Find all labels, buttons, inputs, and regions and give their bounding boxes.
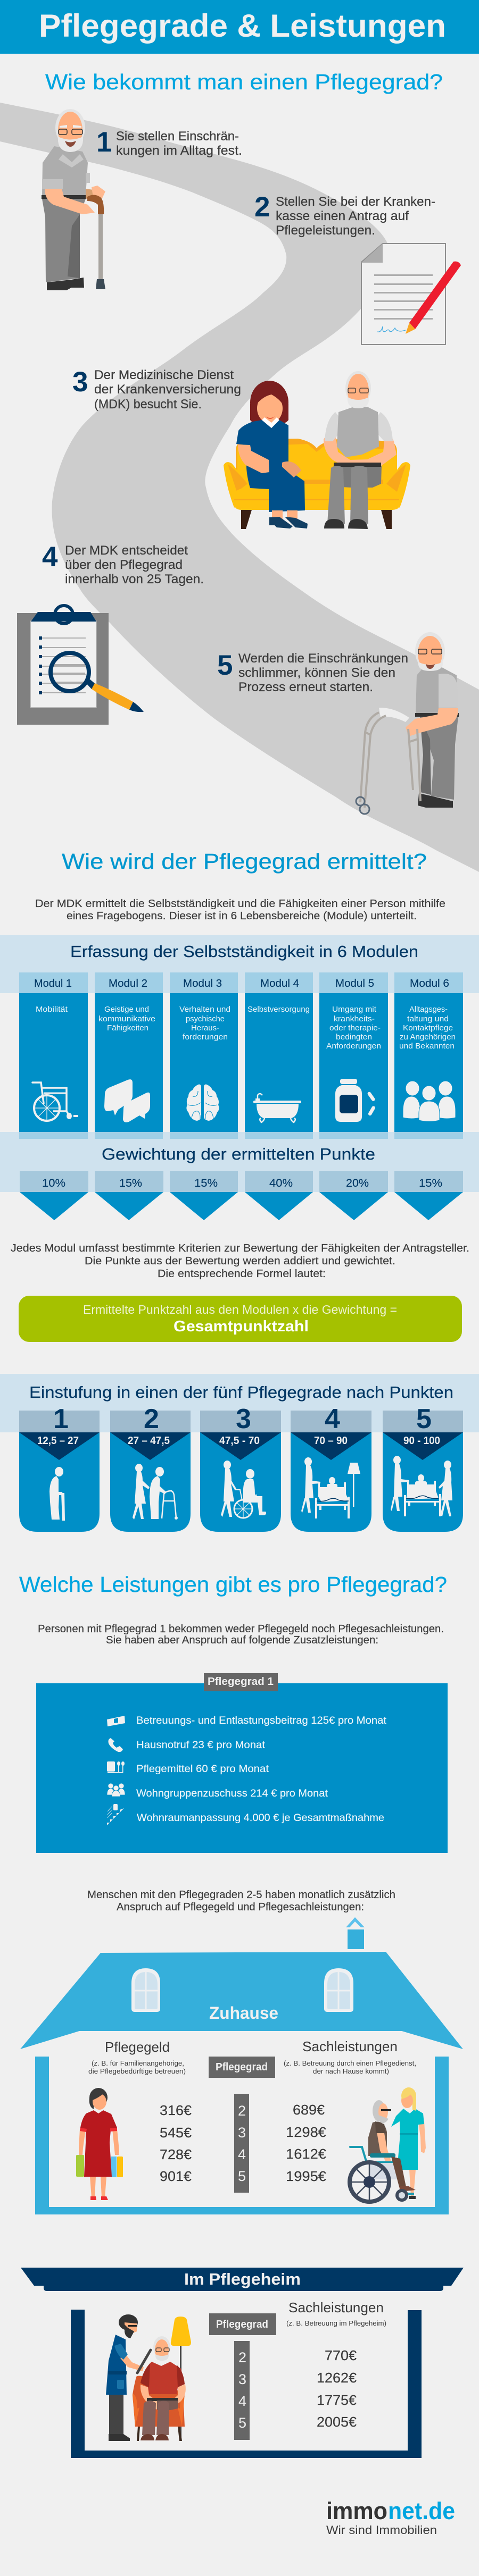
illustration: old man with walker <box>356 632 459 814</box>
step number 1: 1 <box>96 127 112 158</box>
weight 15 percent <box>394 1171 463 1220</box>
icon: pill bottle <box>335 1079 376 1122</box>
module 5 column: Umgang mit <box>332 1005 376 1014</box>
step 4 <box>42 541 204 586</box>
paragraph: criteria: Die entsprechende Formel lautet: <box>158 1268 326 1280</box>
step 4 text: Der MDK entscheidet <box>65 543 188 558</box>
panel: Pflegegrad 1 benefits: Hausnotruf 23 € pro Monat <box>136 1740 266 1751</box>
module 6 column: Modul 6 <box>410 978 449 989</box>
grade bar <box>234 2094 249 2193</box>
module 5 column: oder therapie- <box>329 1024 381 1033</box>
intro paragraph modules: eines Fragebogens. Dieser ist in 6 Lebensbereiche (Module) unterteilt. <box>67 910 417 922</box>
icon: wheelchair <box>32 1083 78 1121</box>
weight 15 percent <box>170 1171 238 1220</box>
paragraph: Pflegegrad 1: Sie haben aber Anspruch auf folgende Zusatzleistungen: <box>106 1634 378 1646</box>
paragraph: Pflegegrade 2-5: Menschen mit den Pflegegraden 2-5 haben monatlich zusätzlich <box>87 1889 395 1901</box>
column header Pflegegeld <box>88 2039 186 2075</box>
illustration: old man with cane <box>42 109 105 290</box>
step 1 <box>96 127 242 158</box>
Sachleistungen values: 1612€ <box>286 2146 327 2162</box>
card: Pflegegrad 5 <box>383 1404 463 1532</box>
weight 20 percent <box>319 1171 388 1220</box>
icon: nurse and person with walker <box>133 1464 178 1520</box>
column header Sachleistungen: (z. B. Betreuung im Pflegeheim) <box>286 2319 386 2327</box>
card: Pflegegrad 5: 5 <box>416 1404 432 1434</box>
Sachleistungen values <box>286 2102 327 2184</box>
panel: Pflegegrad 1 benefits: Wohngruppenzuschuss 214 € pro Monat <box>136 1788 328 1799</box>
icon: brain <box>186 1085 219 1121</box>
module 3 column: forderungen <box>183 1033 228 1042</box>
grade bar: 4 <box>238 2393 246 2409</box>
weight 15 percent: 15% <box>194 1177 218 1189</box>
module 5 column: Anforderungen <box>326 1042 381 1051</box>
box Pflegegrad <box>209 2313 276 2335</box>
Pflegegeld values: 728€ <box>160 2146 192 2162</box>
panel: Pflegegrad 1 benefits: Betreuungs- und Entlastungsbeitrag 125€ pro Monat <box>136 1715 387 1726</box>
grade bar: 5 <box>238 2168 246 2184</box>
step number 4: 4 <box>42 541 58 573</box>
paragraph: Pflegegrad 1: Personen mit Pflegegrad 1 bekommen weder Pflegegeld noch Pflegesachleistungen. <box>38 1623 444 1635</box>
box Pflegegrad <box>209 2057 275 2078</box>
heading Zuhause: Zuhause <box>209 2003 278 2023</box>
icon: nurse at bed with lamp <box>301 1457 360 1518</box>
illustration: woman with shopping bags <box>76 2088 123 2200</box>
weight 40 percent <box>245 1171 313 1220</box>
grade bar: 3 <box>238 2125 246 2141</box>
module 6 column: zu Angehörigen <box>400 1033 456 1042</box>
logo immonet.de: immo <box>326 2497 387 2524</box>
step 5 text: Werden die Einschränkungen <box>238 651 408 666</box>
tag: Pflegegrad 1 <box>204 1673 278 1691</box>
step 1 text: kungen im Alltag fest. <box>116 144 242 158</box>
Pflegegeld values: 545€ <box>160 2125 192 2141</box>
chimney <box>346 1917 365 1949</box>
module 2 column: Geistige und <box>104 1005 149 1014</box>
module 5 column: bedingten <box>336 1033 372 1042</box>
module 6 column: und Bekannten <box>399 1042 455 1051</box>
step 3 <box>72 366 241 412</box>
module 3 column: Verhalten und <box>179 1005 230 1014</box>
step 4 text: innerhalb von 25 Tagen. <box>65 572 204 586</box>
Pflegegeld values: 316€ <box>160 2102 192 2118</box>
weight 15 percent: 15% <box>419 1177 442 1189</box>
module 6 column: Alltagsges- <box>409 1005 448 1014</box>
icon: phone <box>109 1738 123 1752</box>
Pflegegeld values: 901€ <box>160 2168 192 2184</box>
card: Pflegegrad 2: 2 <box>144 1404 159 1434</box>
banner Im Pflegeheim <box>21 2268 464 2291</box>
tag: Pflegegrad 1: Pflegegrad 1 <box>208 1676 274 1688</box>
Pflegegeld values <box>160 2102 192 2184</box>
step 5 text: Prozess erneut starten. <box>238 680 373 694</box>
callout: formula <box>19 1296 462 1342</box>
module 2 column: kommunikative <box>98 1015 155 1023</box>
step 1 text: Sie stellen Einschrän- <box>116 129 239 144</box>
card: Pflegegrad 2 <box>110 1404 191 1532</box>
icon: speech bubbles <box>104 1079 150 1122</box>
banner Im Pflegeheim: Im Pflegeheim <box>184 2270 301 2288</box>
column header Sachleistungen: (z. B. Betreuung durch einen Pflegedienst, <box>284 2059 416 2067</box>
icon: people group small <box>107 1783 125 1797</box>
paragraph: Pflegegrade 2-5 <box>87 1889 395 1913</box>
Sachleistungen values: 1262€ <box>317 2370 357 2386</box>
band heading Erfassung: Erfassung der Selbstständigkeit in 6 Modulen <box>70 942 418 961</box>
step 3 text: der Krankenversicherung <box>94 382 241 397</box>
paragraph: Pflegegrad 1 <box>38 1623 444 1646</box>
card: Pflegegrad 3 <box>200 1404 281 1532</box>
module 5 column: Modul 5 <box>335 978 374 989</box>
grade bar: 3 <box>238 2371 246 2387</box>
module 6 column: taltung und <box>407 1015 449 1023</box>
column header Sachleistungen: Sachleistungen <box>288 2300 384 2315</box>
icon: bathtub <box>253 1094 301 1122</box>
module 4 column: Selbstversorgung <box>247 1005 310 1014</box>
card: Pflegegrad 2: 27 – 47,5 <box>128 1435 170 1447</box>
step 3 text <box>94 368 241 412</box>
icon: two nurses at bed <box>391 1456 452 1516</box>
module 3 column: Heraus- <box>191 1024 219 1033</box>
step 5 <box>217 650 408 694</box>
icon: people group <box>403 1081 456 1122</box>
column header Sachleistungen: der nach Hause kommt) <box>313 2067 389 2075</box>
box Pflegegrad: Pflegegrad <box>216 2319 268 2330</box>
roof window right <box>324 1968 353 2012</box>
step 3 text: (MDK) besucht Sie. <box>94 397 202 412</box>
step 2 text: Pflegeleistungen. <box>276 223 375 238</box>
Sachleistungen values: 689€ <box>293 2102 325 2118</box>
module 3 column: Modul 3 <box>183 978 222 989</box>
icon: person with cane <box>49 1467 65 1521</box>
grade bar: 2 <box>238 2103 246 2119</box>
header banner <box>0 0 479 54</box>
logo immonet.de <box>326 2497 455 2537</box>
column header Sachleistungen <box>284 2038 416 2075</box>
module 5 column: krankheits- <box>334 1015 375 1023</box>
card: Pflegegrad 1: 12,5 – 27 <box>37 1435 79 1447</box>
heading: Wie wird der Pflegegrad ermittelt: Wie wird der Pflegegrad ermittelt? <box>62 849 427 874</box>
column header Sachleistungen <box>286 2300 386 2327</box>
icon: nurse pushing wheelchair <box>221 1461 266 1518</box>
card: Pflegegrad 4: 4 <box>325 1404 340 1434</box>
band heading Einstufung: Einstufung in einen der fünf Pflegegrade nach Punkten <box>29 1383 453 1402</box>
paragraph: criteria: Jedes Modul umfasst bestimmte Kriterien zur Bewertung der Fähigkeiten der Antragsteller. <box>11 1242 469 1254</box>
heading: Welche Leistungen: Welche Leistungen gibt es pro Pflegegrad? <box>19 1572 447 1597</box>
weight 40 percent: 40% <box>269 1177 293 1189</box>
band: Gewichtung <box>0 1132 479 1192</box>
band heading Gewichtung: Gewichtung der ermittelten Punkte <box>102 1145 375 1163</box>
paragraph: Pflegegrade 2-5: Anspruch auf Pflegegeld und Pflegesachleistungen: <box>117 1901 364 1913</box>
weight 20 percent: 20% <box>346 1177 369 1189</box>
logo immonet.de: net.de <box>388 2497 455 2524</box>
logo immonet.de: Wir sind Immobilien <box>326 2523 437 2537</box>
Sachleistungen values: 770€ <box>325 2347 357 2363</box>
column header Pflegegeld: die Pflegebedürftige betreuen) <box>88 2067 186 2075</box>
column header Pflegegeld: Pflegegeld <box>105 2039 170 2055</box>
step 3 text: Der Medizinische Dienst <box>94 368 234 382</box>
box Pflegegrad: Pflegegrad <box>216 2061 268 2073</box>
grade bar: 4 <box>238 2146 246 2162</box>
icon: banknote <box>107 1716 125 1726</box>
module 4 column <box>245 972 313 1139</box>
illustration: nurse with man in wheelchair <box>350 2087 426 2202</box>
icon: signed document with pencil <box>361 244 461 345</box>
paragraph: criteria: Die Punkte aus der Bewertung werden addiert und gewichtet. <box>85 1255 395 1267</box>
panel: house Zuhause <box>20 1917 463 2214</box>
step 4 text: über den Pflegegrad <box>65 558 183 572</box>
module 3 column <box>170 972 238 1139</box>
weight 15 percent: 15% <box>119 1177 142 1189</box>
Sachleistungen values: 2005€ <box>317 2414 357 2430</box>
illustration: woman and man on yellow sofa <box>224 371 410 529</box>
step number 3: 3 <box>72 366 88 398</box>
intro paragraph modules: Der MDK ermittelt die Selbstständigkeit und die Fähigkeiten einer Person mithilfe <box>35 898 445 910</box>
module 1 column <box>19 972 88 1139</box>
icon: clipboard with magnifier <box>17 606 144 725</box>
intro paragraph modules <box>35 898 445 922</box>
module 2 column <box>95 972 163 1139</box>
card: Pflegegrad 3: 47,5 - 70 <box>219 1435 260 1447</box>
house walls <box>35 2057 449 2214</box>
card: Pflegegrad 1 <box>19 1404 100 1532</box>
winding road <box>0 103 479 872</box>
title: Pflegegrade & Leistungen <box>39 8 446 44</box>
step 4 text <box>65 543 204 586</box>
illustration: caregiver and seated man <box>106 2314 191 2441</box>
column header Pflegegeld: (z. B. für Familienangehörige, <box>92 2059 184 2067</box>
icon: care supplies <box>107 1761 125 1773</box>
card: Pflegegrad 5: 90 - 100 <box>403 1435 440 1447</box>
Sachleistungen values <box>317 2347 357 2430</box>
roof window left <box>131 1968 160 2012</box>
step 5 text <box>238 651 408 694</box>
Sachleistungen values: 1298€ <box>286 2124 327 2140</box>
icon: stairlift <box>107 1804 124 1825</box>
card: Pflegegrad 4: 70 – 90 <box>314 1435 348 1447</box>
heading: Wie bekommt man einen Pflegegrad: Wie bekommt man einen Pflegegrad? <box>45 70 443 94</box>
module 2 column: Modul 2 <box>109 978 147 989</box>
card: Pflegegrad 3: 3 <box>236 1404 251 1434</box>
weight 10 percent <box>20 1171 88 1220</box>
step 2 <box>254 191 435 238</box>
panel: Pflegegrad 1 benefits <box>36 1673 448 1853</box>
module 2 column: Fähigkeiten <box>107 1024 148 1033</box>
column header Sachleistungen: Sachleistungen <box>302 2038 398 2054</box>
module 3 column: psychische <box>186 1015 225 1023</box>
module 1 column: Mobilität <box>36 1005 68 1014</box>
module 6 column <box>394 972 463 1139</box>
module 5 column <box>319 972 388 1139</box>
module 6 column: Kontaktpflege <box>403 1024 453 1033</box>
weight 10 percent: 10% <box>42 1177 65 1189</box>
grade bar: 5 <box>238 2415 246 2431</box>
step 2 text: Stellen Sie bei der Kranken- <box>276 195 435 209</box>
step 1 text <box>116 129 242 158</box>
weight 15 percent <box>95 1171 163 1220</box>
step 5 text: schlimmer, können Sie den <box>238 666 395 680</box>
callout: formula: Gesamtpunktzahl <box>174 1318 309 1335</box>
step number 5: 5 <box>217 650 233 681</box>
step number 2: 2 <box>254 191 270 223</box>
module 4 column: Modul 4 <box>260 978 299 989</box>
roof <box>20 1952 463 2049</box>
panel: Im Pflegeheim <box>21 2268 464 2458</box>
step 2 text <box>276 195 435 238</box>
grade bar <box>234 2341 250 2440</box>
nursing home walls <box>71 2310 422 2458</box>
panel: Pflegegrad 1 benefits: Wohnraumanpassung 4.000 € je Gesamtmaßnahme <box>137 1813 384 1824</box>
panel: Pflegegrad 1 benefits: Pflegemittel 60 € pro Monat <box>136 1764 269 1775</box>
Sachleistungen values: 1995€ <box>286 2168 327 2184</box>
step 2 text: kasse einen Antrag auf <box>276 209 409 223</box>
card: Pflegegrad 4 <box>291 1404 371 1532</box>
grade bar: 2 <box>238 2350 246 2365</box>
callout: formula: Ermittelte Punktzahl aus den Modulen x die Gewichtung = <box>83 1303 397 1316</box>
Sachleistungen values: 1775€ <box>317 2392 357 2408</box>
card: Pflegegrad 1: 1 <box>53 1404 69 1434</box>
band: Erfassung <box>0 935 479 993</box>
module 1 column: Modul 1 <box>34 978 72 989</box>
paragraph: criteria <box>11 1242 469 1280</box>
band: Einstufung <box>0 1374 479 1432</box>
